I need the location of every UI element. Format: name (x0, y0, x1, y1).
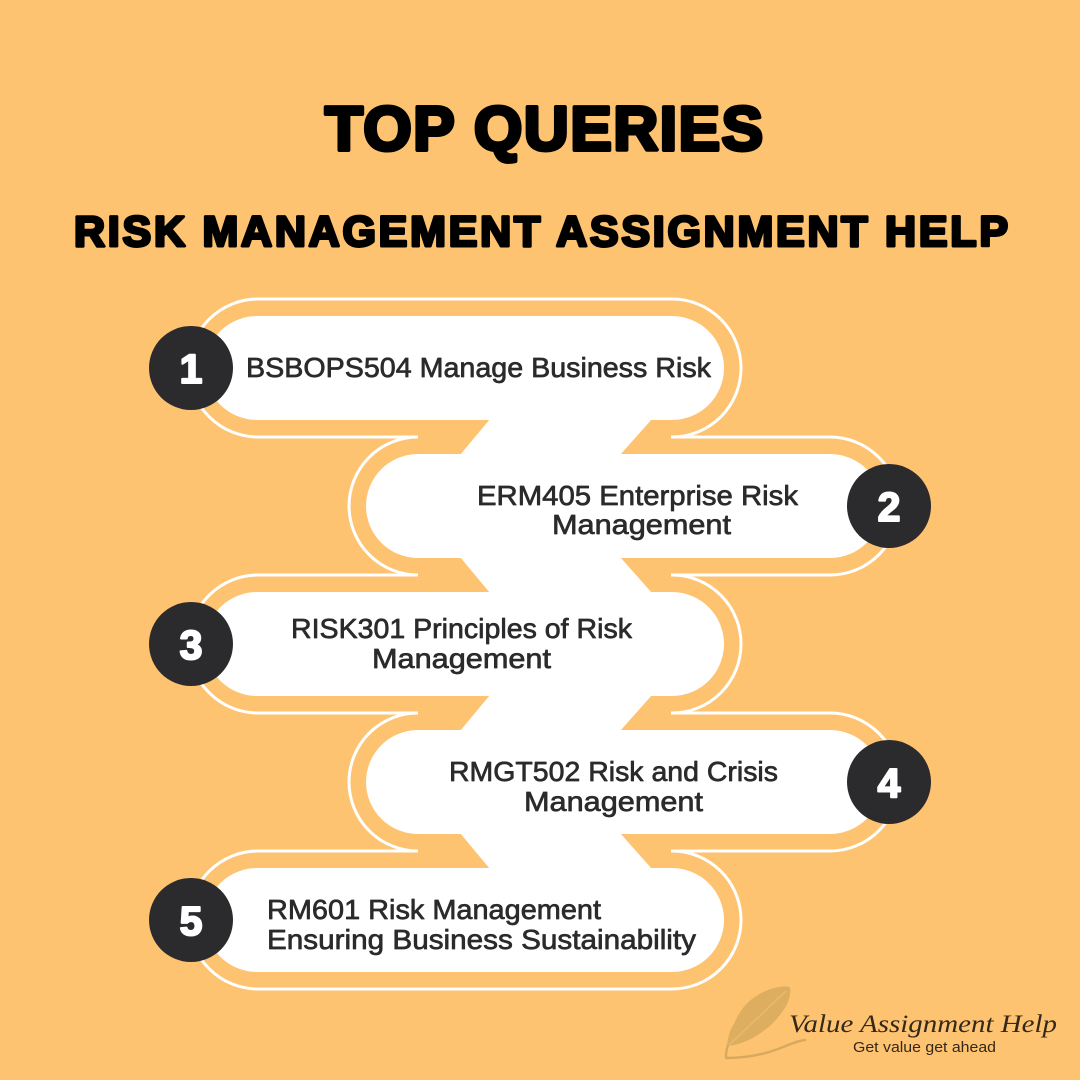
step 3 badge (149, 602, 233, 686)
subtitle: RISK MANAGEMENT ASSIGNMENT HELP (74, 208, 1008, 256)
step 3 number: 3 (180, 622, 202, 668)
logo name: Value Assignment Help (789, 1011, 1057, 1038)
step 1 number: 1 (180, 346, 202, 392)
icon: feather quill (726, 986, 805, 1058)
step 5 pill (205, 868, 724, 972)
step 5 label (267, 894, 696, 955)
step 1 (149, 316, 724, 420)
step 2 pill (366, 454, 882, 558)
step 2 badge (847, 464, 931, 548)
step 5 number: 5 (180, 898, 202, 944)
white connectors between steps (460, 419, 652, 869)
step 3 label: Management (372, 643, 551, 674)
step 4 badge (847, 740, 931, 824)
logo (726, 986, 1057, 1058)
logo tagline: Get value get ahead (853, 1039, 996, 1056)
step 2 label (477, 480, 799, 540)
step 5 label: RM601 Risk Management (267, 894, 601, 925)
step 4 (366, 730, 931, 834)
step 5 label: Ensuring Business Sustainability (267, 924, 696, 955)
step 4 label: Management (524, 786, 703, 817)
step 1 label: BSBOPS504 Manage Business Risk (246, 352, 712, 383)
step 2 (366, 454, 931, 558)
step 5 badge (149, 878, 233, 962)
step 2 label: ERM405 Enterprise Risk (477, 480, 799, 511)
step 1 badge (149, 326, 233, 410)
step 3 pill (205, 592, 724, 696)
step 2 number: 2 (878, 484, 900, 530)
outline ribbon around steps (189, 299, 899, 989)
step 2 label: Management (552, 509, 731, 540)
title: TOP QUERIES (325, 95, 763, 164)
step 4 pill (366, 730, 882, 834)
step 4 number: 4 (878, 760, 901, 806)
step 4 label (449, 756, 778, 817)
step 3 label (291, 613, 633, 674)
step 1 pill (205, 316, 724, 420)
step 5 (149, 868, 724, 972)
step 3 (149, 592, 724, 696)
step 3 label: RISK301 Principles of Risk (291, 613, 633, 644)
step 4 label: RMGT502 Risk and Crisis (449, 756, 778, 787)
